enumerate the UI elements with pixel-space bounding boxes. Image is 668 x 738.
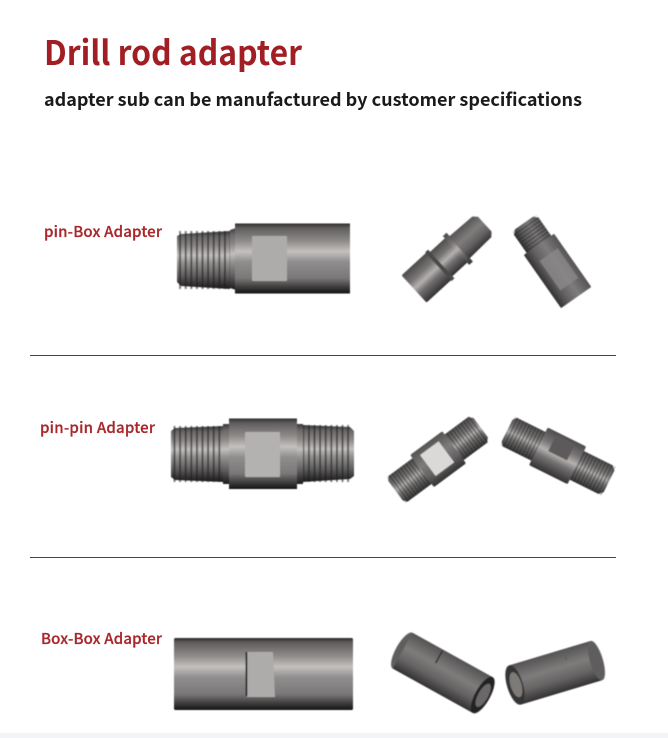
subtitle: adapter sub can be manufactured by customer specifications xyxy=(44,86,582,112)
bottom strip xyxy=(0,733,668,738)
pin-pin adapter angled view 1 xyxy=(384,412,493,507)
label: Box-Box Adapter: Box-Box Adapter xyxy=(41,628,163,649)
box-box adapter angled view 1 xyxy=(387,629,499,717)
pin-box adapter angled view 2 xyxy=(509,212,591,308)
divider 2 xyxy=(30,557,616,558)
label: pin-Box Adapter: pin-Box Adapter xyxy=(44,221,163,242)
pin-pin adapter side view xyxy=(171,418,354,489)
label: pin-pin Adapter: pin-pin Adapter xyxy=(40,417,156,438)
pin-pin adapter angled view 2 xyxy=(498,412,618,500)
pin-box adapter side view xyxy=(177,224,350,294)
box-box adapter angled view 2 xyxy=(501,639,609,707)
divider 1 xyxy=(30,355,616,356)
pin-box adapter angled view 1 xyxy=(401,210,498,303)
box-box adapter side view xyxy=(174,638,353,710)
title: Drill rod adapter xyxy=(44,26,302,75)
